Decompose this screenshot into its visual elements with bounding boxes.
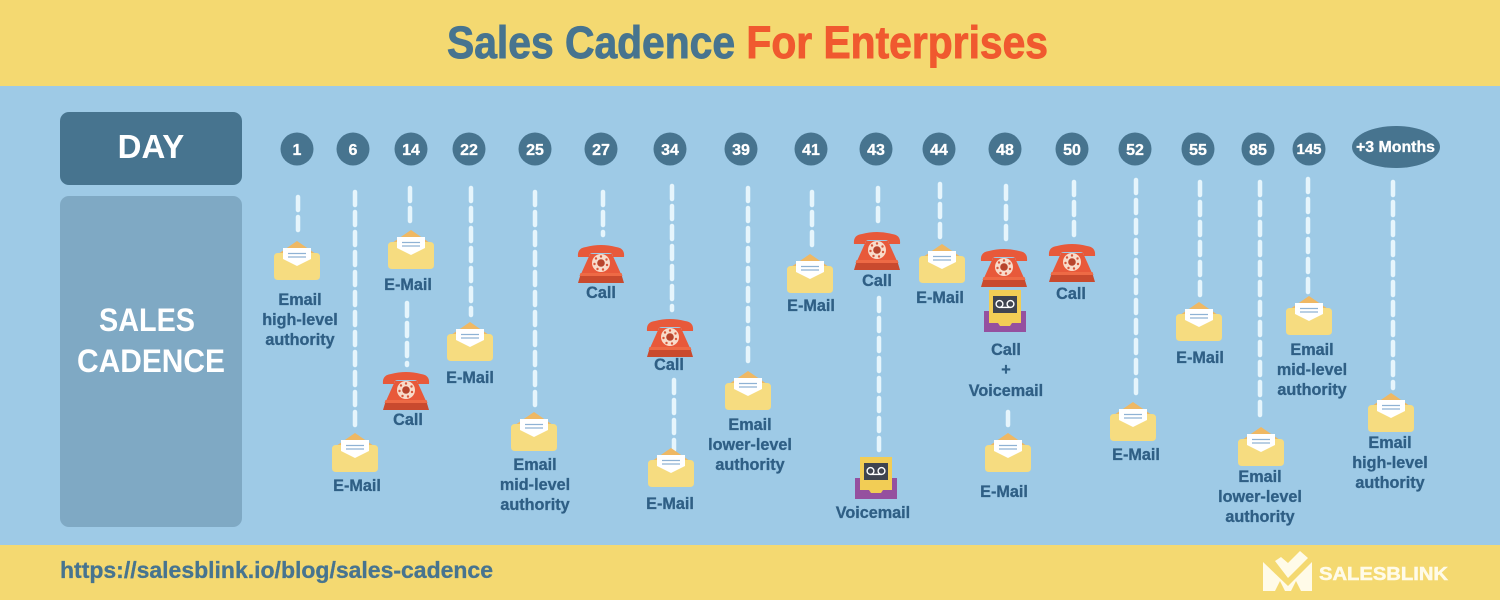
- day markers row: 25: [526, 142, 544, 159]
- connector lines: [298, 179, 1393, 450]
- day markers row: 22: [460, 142, 478, 159]
- step: day 52 email: E-Mail: [1112, 446, 1160, 464]
- step: day 55 email: E-Mail: [1176, 349, 1224, 367]
- step: day 1 email: Email: [278, 291, 322, 309]
- step: day 43 voicemail: Voicemail: [836, 504, 910, 522]
- step: day 43 call: [854, 232, 900, 290]
- step: day 145 email: authority: [1277, 381, 1347, 399]
- step: day 1 email: [262, 241, 338, 349]
- step: day 39 email: authority: [715, 456, 785, 474]
- day markers row: 48: [996, 142, 1014, 159]
- step: day 85 email: Email: [1238, 468, 1282, 486]
- step: day 1 email: high-level: [262, 311, 338, 329]
- day markers row: 6: [349, 142, 358, 159]
- step: day 85 email: authority: [1225, 508, 1295, 526]
- step: day 1 email: authority: [265, 331, 335, 349]
- step: +3 months email: high-level: [1352, 454, 1428, 472]
- step: day 48 call and voicemail: [969, 249, 1043, 400]
- day markers row: 1: [293, 142, 302, 159]
- header band: [0, 0, 1500, 86]
- step: day 14 call: [383, 372, 429, 429]
- step: day 6 email: [332, 433, 381, 495]
- step: day 50 call: [1049, 244, 1095, 303]
- step: day 34 call: [647, 319, 693, 374]
- step: day 85 email: [1218, 427, 1302, 526]
- day markers row: [280, 126, 1440, 168]
- panel: sales cadence label: CADENCE: [77, 343, 225, 379]
- day markers row: 52: [1126, 142, 1144, 159]
- step: day 34 call: Call: [654, 356, 684, 374]
- step: day 52 email: [1110, 402, 1160, 464]
- panel: sales cadence label: [60, 196, 242, 527]
- step: day 39 email: Email: [728, 416, 772, 434]
- day markers row: 43: [867, 142, 885, 159]
- footer url: https://salesblink.io/blog/sales-cadence: [60, 557, 493, 583]
- step: day 48 email: [980, 433, 1031, 501]
- step: day 27 call: Call: [586, 284, 616, 302]
- step: day 48 call and voicemail: Call: [991, 341, 1021, 359]
- step: day 6 email: E-Mail: [333, 477, 381, 495]
- step: day 48 call and voicemail: +: [1001, 361, 1011, 379]
- panel: sales cadence label: SALES: [99, 302, 195, 338]
- panel: day label: DAY: [118, 128, 184, 165]
- day markers row: 50: [1063, 142, 1081, 159]
- day markers row: 145: [1296, 141, 1322, 158]
- step: day 34 email: [646, 448, 694, 513]
- day markers row: 14: [402, 142, 420, 159]
- day markers row: 39: [732, 142, 750, 159]
- step: day 43 call: Call: [862, 272, 892, 290]
- step: day 27 call: [578, 245, 624, 302]
- title: Sales Cadence For Enterprises: [447, 17, 1048, 68]
- step: +3 months email: [1352, 393, 1428, 492]
- step: day 44 email: [916, 244, 965, 307]
- day markers row: +3 Months: [1356, 139, 1435, 156]
- step: day 145 email: Email: [1290, 341, 1334, 359]
- step: day 14 email: [384, 230, 434, 294]
- step: day 39 email: lower-level: [708, 436, 792, 454]
- step: day 25 email: Email: [513, 456, 557, 474]
- step: +3 months email: Email: [1368, 434, 1412, 452]
- step: day 22 email: [446, 322, 494, 387]
- step: day 25 email: [500, 412, 570, 514]
- step: day 50 call: Call: [1056, 285, 1086, 303]
- step: day 14 call: Call: [393, 411, 423, 429]
- step: day 48 call and voicemail: Voicemail: [969, 382, 1043, 400]
- step: day 55 email: [1176, 302, 1224, 367]
- step: +3 months email: authority: [1355, 474, 1425, 492]
- step: day 41 email: E-Mail: [787, 297, 835, 315]
- step: day 145 email: mid-level: [1277, 361, 1347, 379]
- day markers row: 34: [661, 142, 679, 159]
- step: day 41 email: [787, 254, 835, 315]
- step: day 39 email: [708, 371, 792, 474]
- step: day 25 email: authority: [500, 496, 570, 514]
- step: day 25 email: mid-level: [500, 476, 570, 494]
- footer band: [0, 545, 1500, 600]
- step: day 43 voicemail: [836, 457, 910, 522]
- day markers row: 41: [802, 142, 820, 159]
- day markers row: 55: [1189, 142, 1207, 159]
- step: day 85 email: lower-level: [1218, 488, 1302, 506]
- step: day 48 email: E-Mail: [980, 483, 1028, 501]
- step: day 44 email: E-Mail: [916, 289, 964, 307]
- logo: salesblink: [1263, 551, 1448, 591]
- day markers row: 27: [592, 142, 610, 159]
- step: day 22 email: E-Mail: [446, 369, 494, 387]
- day markers row: 85: [1249, 142, 1267, 159]
- step: day 145 email: [1277, 296, 1347, 399]
- day markers row: 44: [930, 142, 948, 159]
- step: day 14 email: E-Mail: [384, 276, 432, 294]
- step: day 34 email: E-Mail: [646, 495, 694, 513]
- panel: day label: [60, 112, 242, 185]
- logo: salesblink: SALESBLINK: [1319, 564, 1448, 584]
